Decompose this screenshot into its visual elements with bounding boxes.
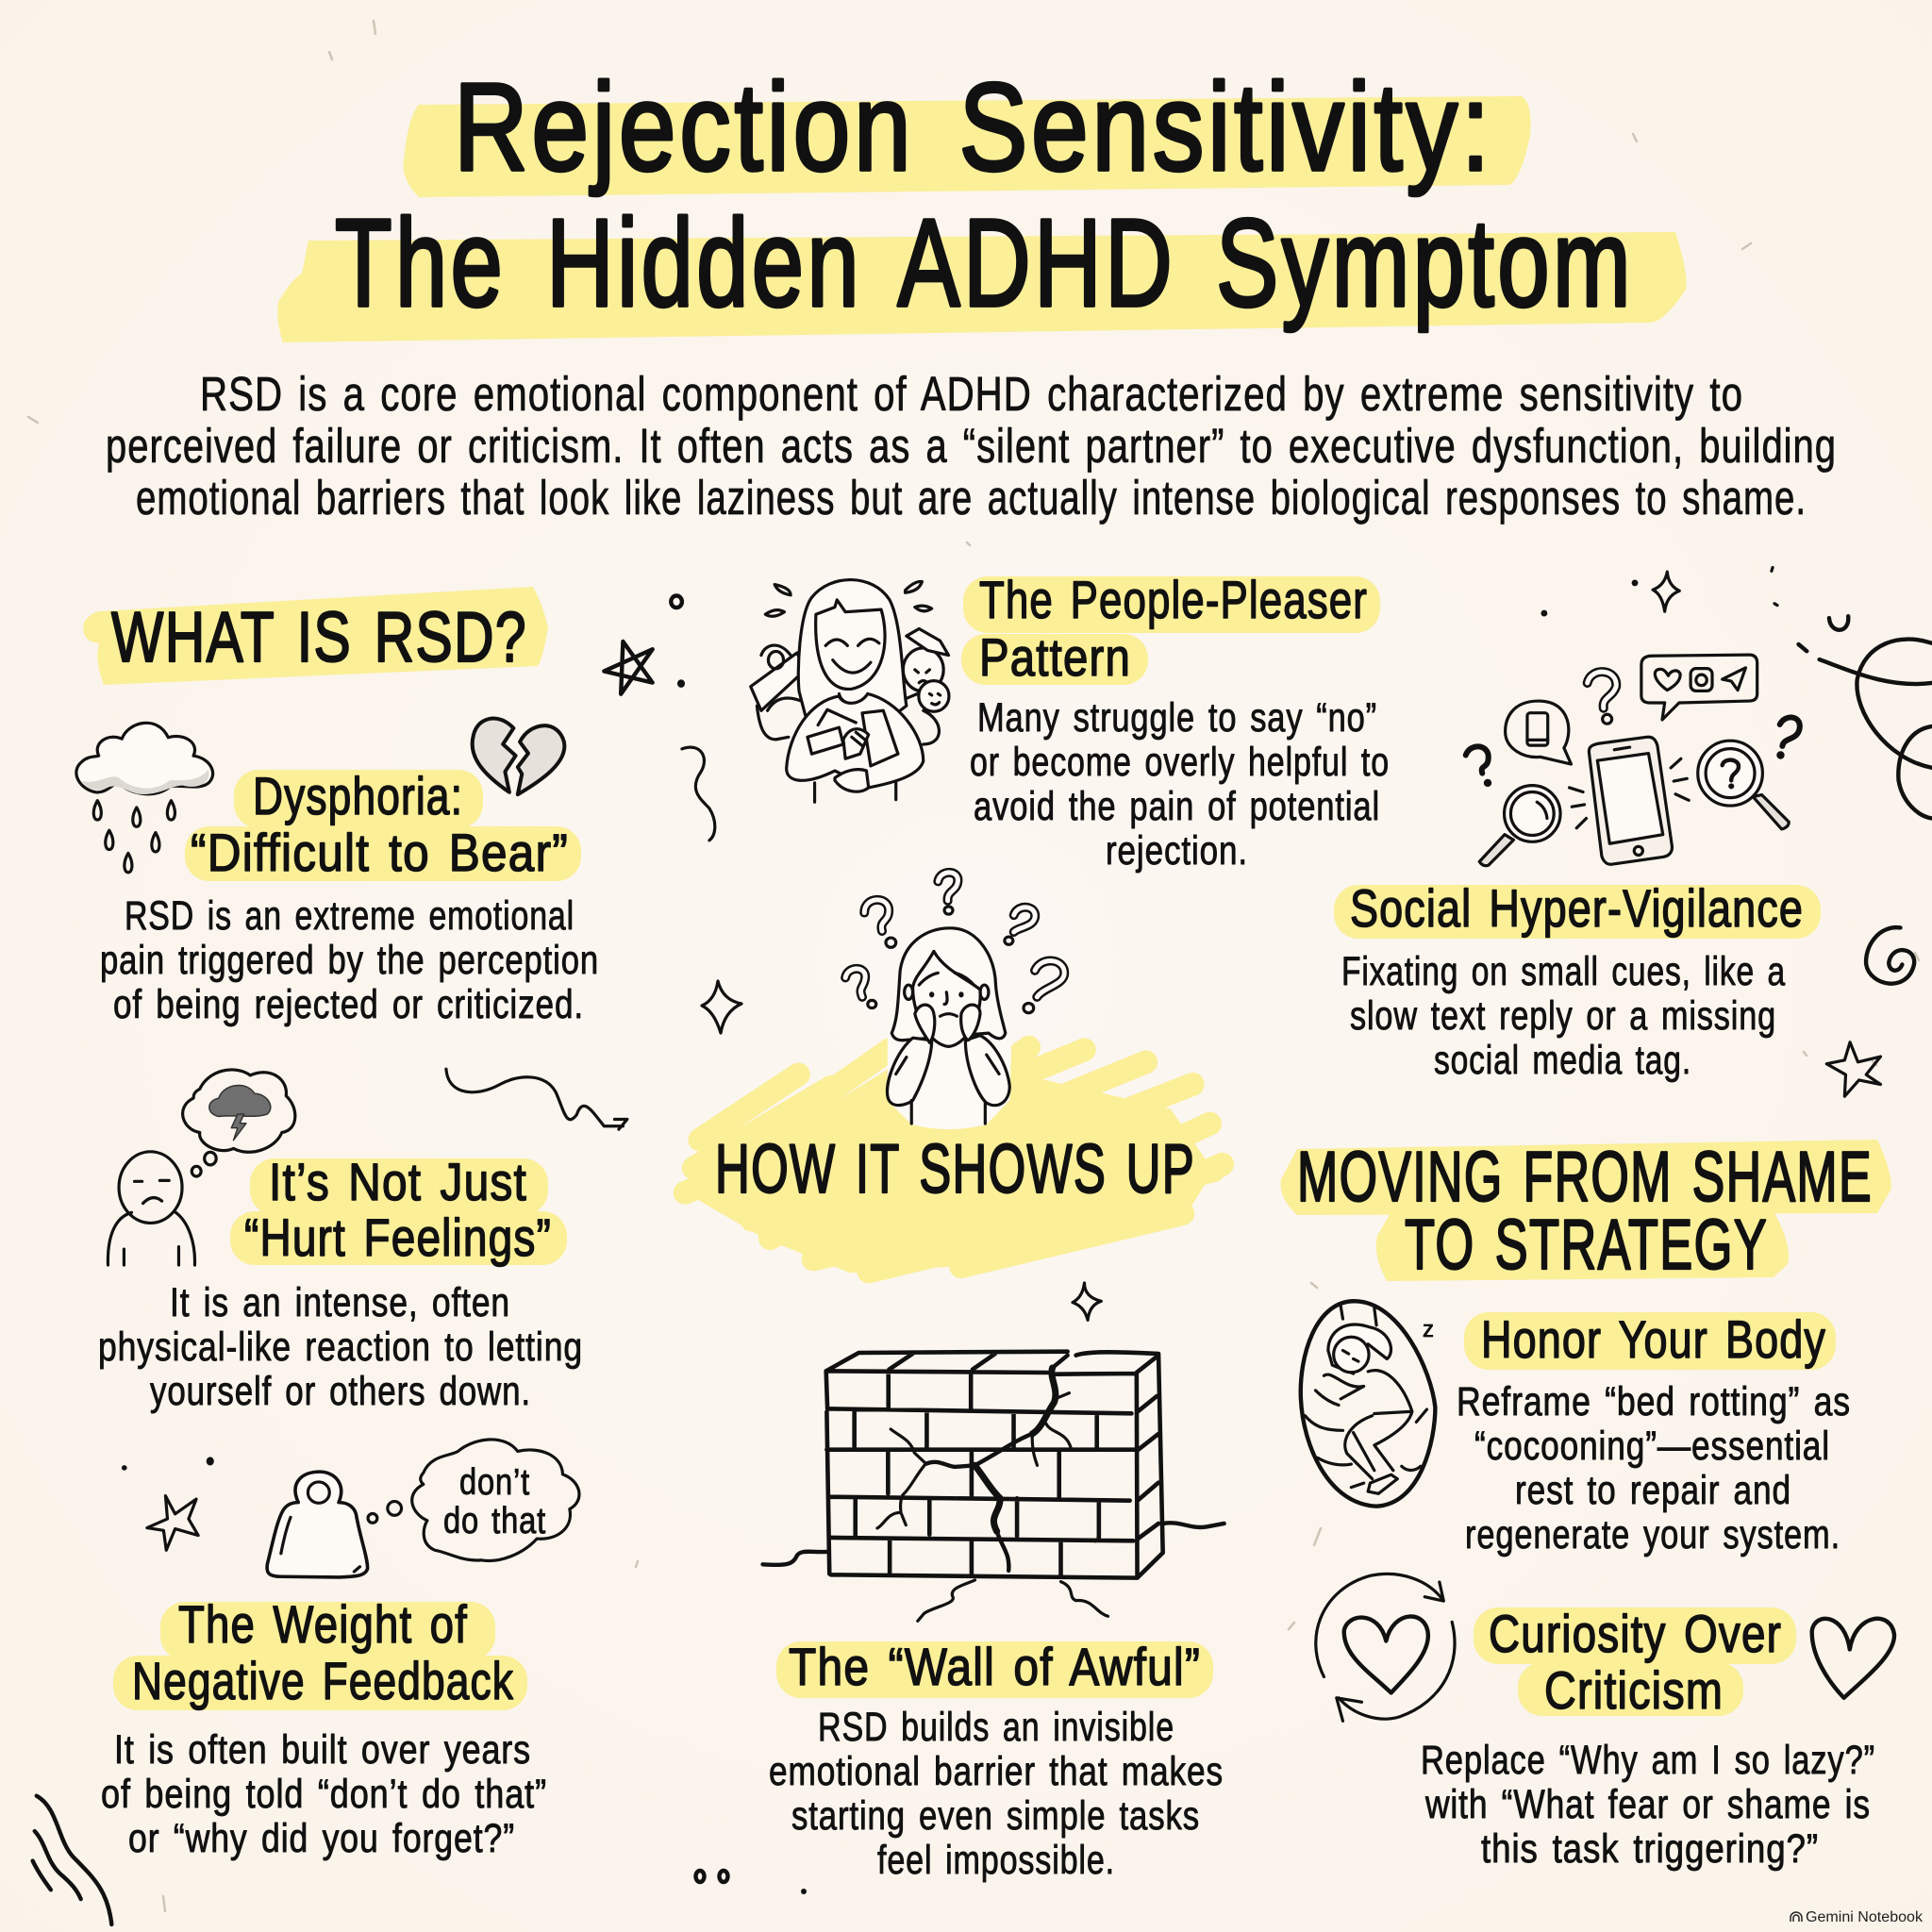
icon: sad person with storm thought [108,1070,295,1265]
card: social hyper-vigilance [1334,878,1821,1083]
card: dysphoria: Dysphoria: [253,766,463,825]
bubble text: don't do that [443,1462,546,1541]
card: curiosity over criticism: Curiosity Over [1489,1604,1782,1663]
heading: what is RSD [83,587,548,685]
icon: sleeping z: z [1423,1317,1435,1342]
card: dysphoria: of being rejected or criticized. [113,982,584,1027]
card: not just hurt feelings: It’s Not Just [269,1152,527,1211]
icon: worried woman with question marks [845,873,1064,1129]
icon: people pleaser woman [751,580,949,802]
heading: moving from shame to strategy: TO STRATEGY [1405,1205,1768,1284]
card: weight of negative feedback: Negative Feedback [132,1651,514,1710]
card: social hyper-vigilance: Social Hyper-Vigilance [1350,878,1804,938]
card: wall of awful [769,1637,1224,1883]
card: dysphoria [100,766,599,1027]
icon: person in cocoon [1301,1301,1435,1507]
card: social hyper-vigilance: Fixating on small cues, like a [1341,949,1786,994]
card: honor your body: “cocooning”—essential [1474,1424,1830,1469]
panel: moving from shame to strategy [1281,1137,1894,1872]
card: people pleaser pattern: avoid the pain of potential [974,784,1380,829]
card: honor your body: rest to repair and [1515,1468,1791,1513]
bubble text: don't do that: do that [443,1501,546,1541]
icon: rain cloud [76,723,213,873]
icon: heart [1812,1619,1894,1698]
intro text [106,367,1837,525]
heading: moving from shame to strategy [1281,1137,1891,1284]
icon: phone with magnifiers and chat bubbles [1466,655,1800,866]
panel: what is RSD [76,587,599,1861]
card: weight of negative feedback: The Weight of [178,1594,468,1654]
card: honor your body: Reframe “bed rotting” as [1457,1379,1851,1424]
card: weight of negative feedback: It is often built over years [114,1727,531,1773]
card: honor your body [1457,1309,1851,1557]
card: not just hurt feelings: yourself or others down. [150,1369,531,1414]
heading: how it shows up: HOW IT SHOWS UP [715,1131,1195,1208]
card: people pleaser pattern [961,570,1390,874]
card: honor your body: Honor Your Body [1481,1309,1826,1369]
card: weight of negative feedback: or “why did you forget?” [128,1816,515,1861]
card: not just hurt feelings: “Hurt Feelings” [244,1208,552,1267]
card: social hyper-vigilance: slow text reply or a missing [1350,993,1776,1039]
heading scribble highlight [685,1047,1223,1273]
card: honor your body: regenerate your system. [1465,1512,1840,1557]
card: dysphoria: RSD is an extreme emotional [125,893,575,939]
card: wall of awful: feel impossible. [877,1838,1115,1883]
title: Rejection Sensitivity: [454,58,1493,196]
card: dysphoria: “Difficult to Bear” [191,823,569,882]
card: not just hurt feelings: It is an intense, often [170,1280,510,1325]
bubble text: don't do that: don’t [459,1462,530,1503]
card: people pleaser pattern: The People-Pleaser [979,570,1368,629]
card: people pleaser pattern: rejection. [1106,828,1248,874]
heading: what is RSD: WHAT IS RSD? [111,597,527,676]
panel: how it shows up [685,567,1932,1883]
card: weight of negative feedback: of being told “don’t do that” [101,1772,547,1817]
icon: broken heart [473,719,564,794]
card: wall of awful: starting even simple tasks [791,1793,1200,1839]
card: people pleaser pattern: Pattern [979,627,1131,687]
card: not just hurt feelings: physical-like reaction to letting [98,1324,583,1370]
decorative doodles left and centre [33,596,807,1924]
doodles: top right [1541,567,1932,1096]
watermark: Gemini Notebook: Gemini Notebook [1806,1909,1923,1925]
card: wall of awful: emotional barrier that makes [769,1749,1224,1794]
icon: heart in circular arrows [1316,1574,1455,1721]
icon: weight with thought bubble [267,1440,579,1577]
card: dysphoria: pain triggered by the perception [100,938,599,983]
card: weight of negative feedback [101,1594,547,1861]
card: people pleaser pattern: or become overly helpful to [970,740,1390,785]
card: curiosity over criticism: this task triggering?” [1481,1826,1819,1872]
card: curiosity over criticism [1421,1604,1875,1872]
card: curiosity over criticism: Criticism [1544,1660,1724,1720]
title [277,58,1687,342]
card: people pleaser pattern: Many struggle to say “no” [977,695,1377,741]
card: social hyper-vigilance: social media tag. [1434,1038,1691,1083]
card: wall of awful: The “Wall of Awful” [789,1637,1201,1696]
card: wall of awful: RSD builds an invisible [818,1705,1174,1750]
icon: cracked brick wall [763,1283,1224,1621]
card: not just hurt feelings [98,1152,583,1414]
